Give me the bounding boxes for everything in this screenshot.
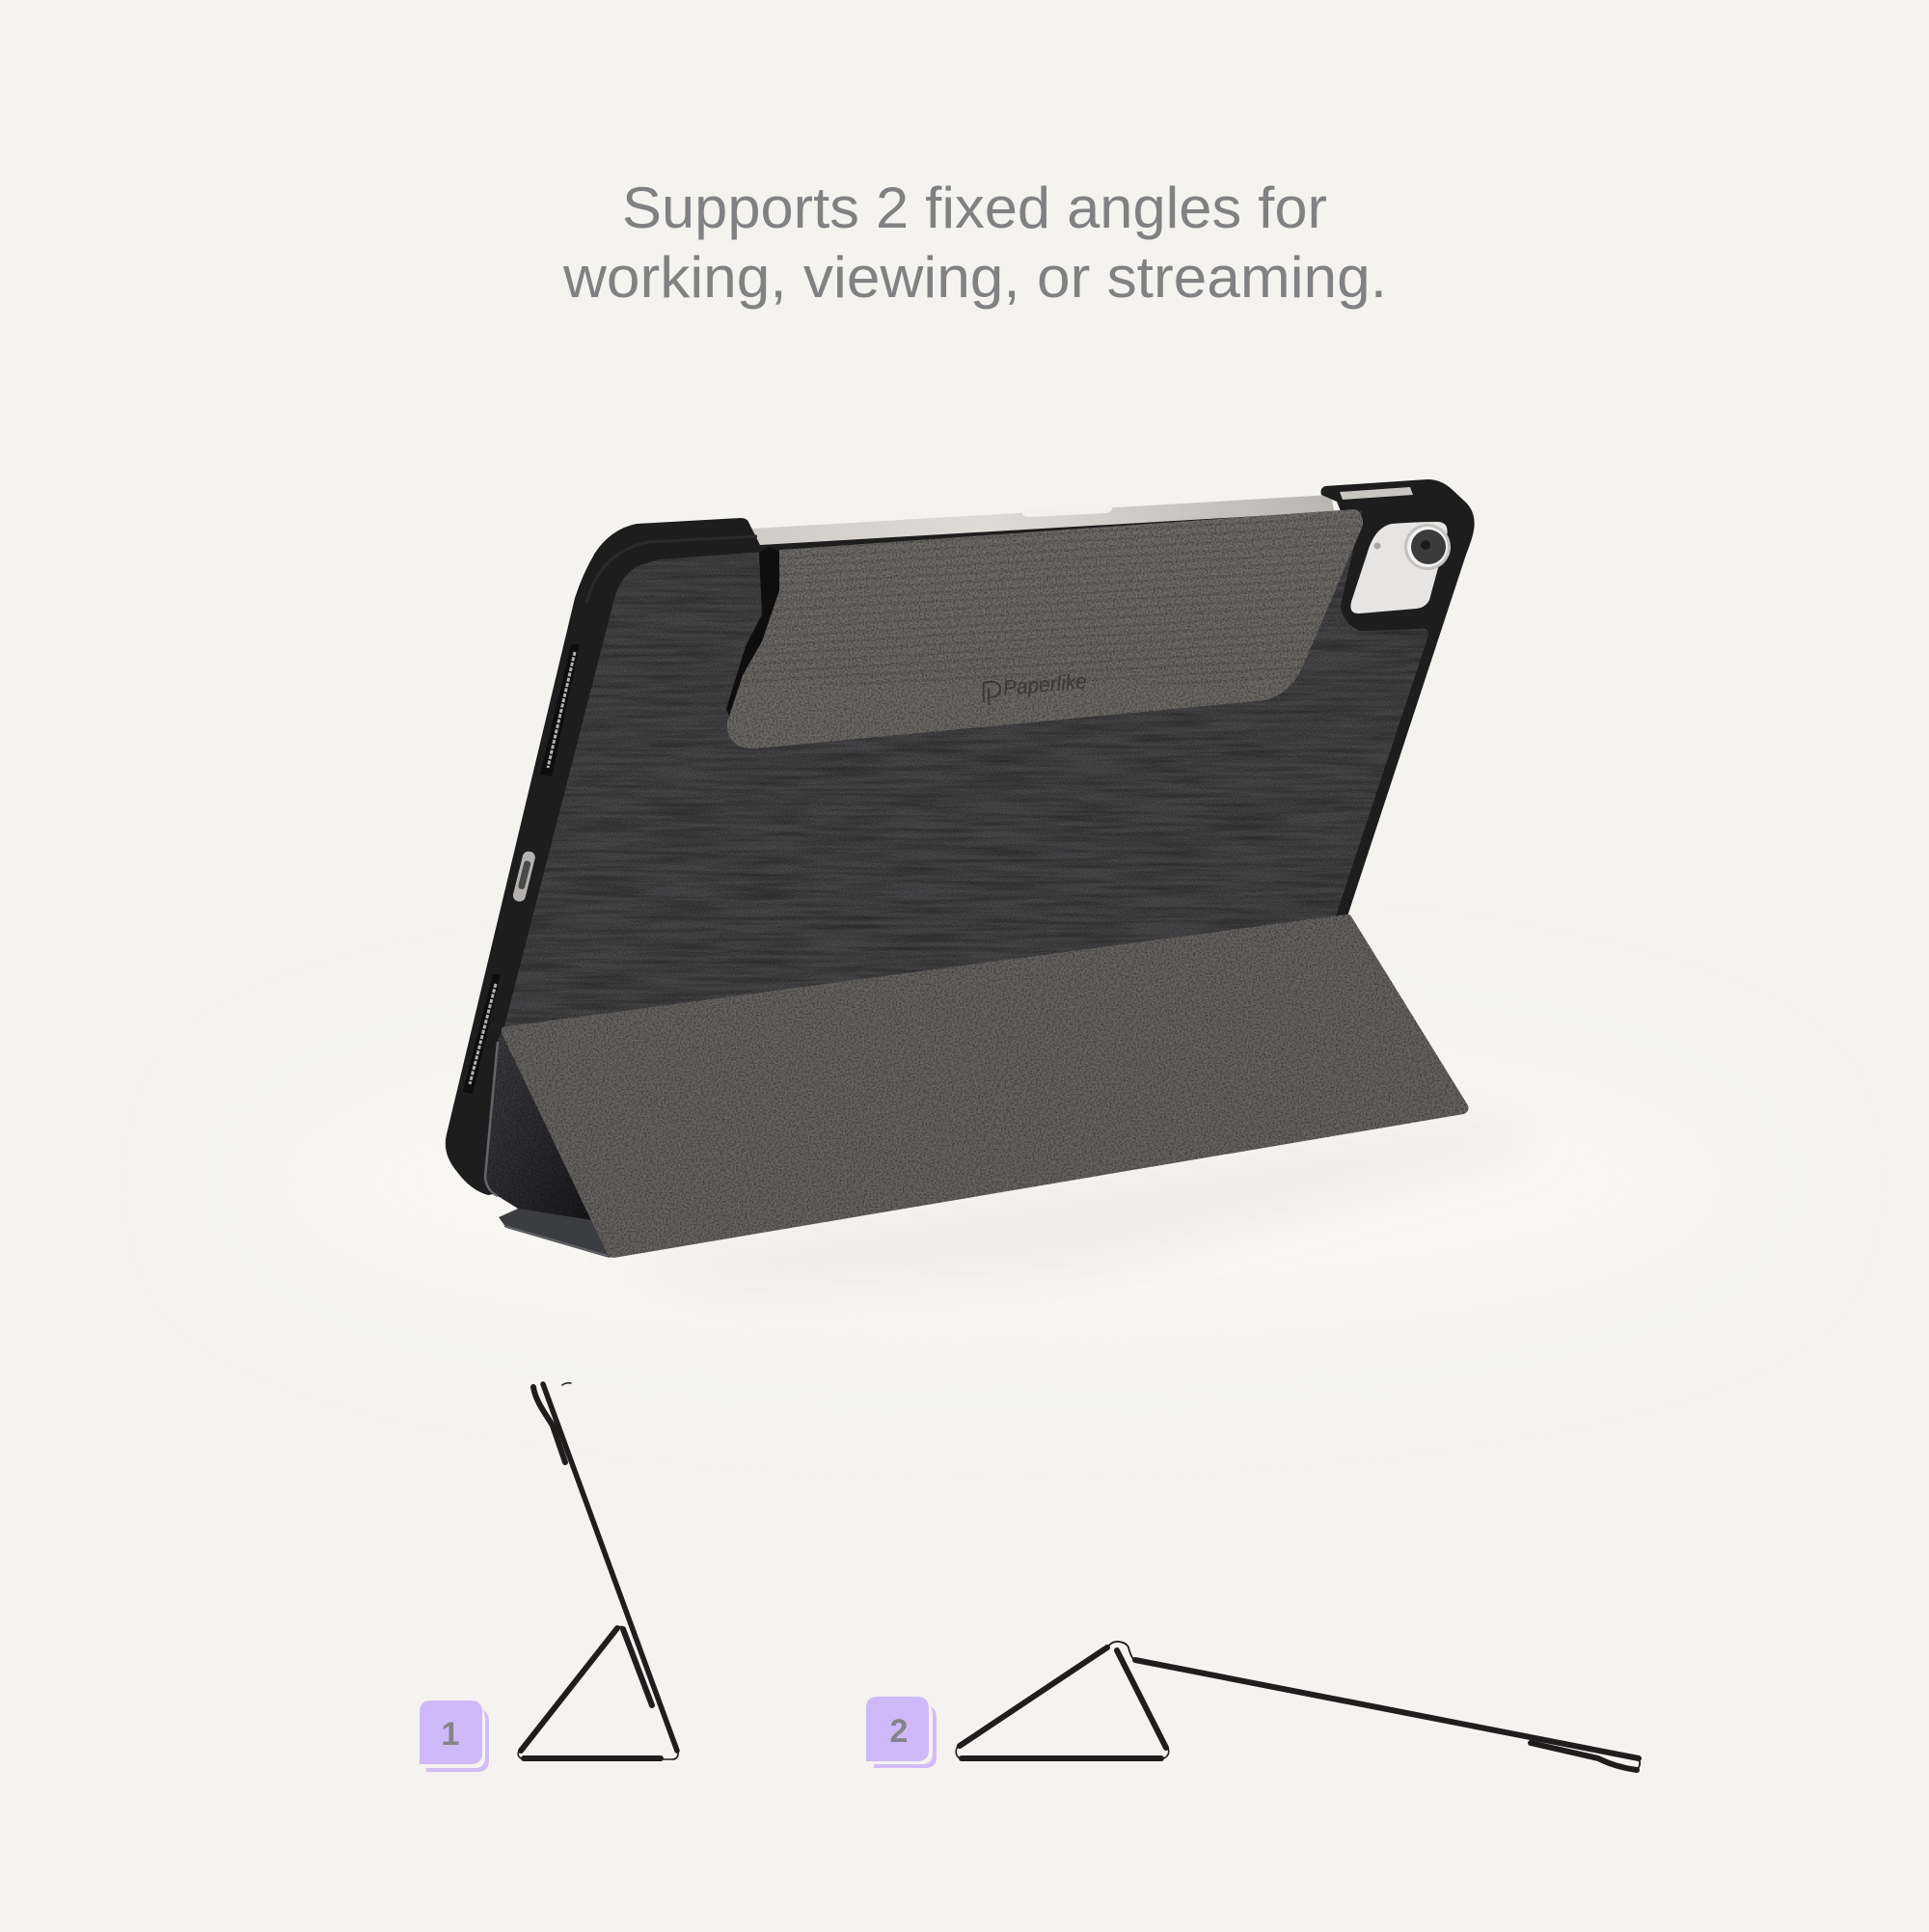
- flap edge: [504, 1226, 608, 1256]
- badge front: [866, 1697, 929, 1761]
- thin joints: [956, 1746, 1169, 1759]
- microphone dot: [1373, 542, 1381, 550]
- heading: Supports 2 fixed angles for: [622, 176, 1327, 240]
- heading: [562, 176, 1387, 310]
- heading: working, viewing, or streaming.: [562, 245, 1387, 310]
- thin joints: [518, 1751, 678, 1759]
- badge back layer: [874, 1706, 937, 1768]
- camera plateau: [1350, 522, 1448, 613]
- top port window: [1340, 487, 1413, 500]
- tablet line: [543, 1384, 677, 1751]
- black camera surround: [1341, 502, 1463, 631]
- badge back layer: [426, 1710, 489, 1772]
- back panel fabric: [502, 511, 1428, 1037]
- badge number: 2: [890, 1713, 908, 1750]
- right leg: [1117, 1650, 1166, 1748]
- lens: [1404, 524, 1451, 570]
- origami stand panel: [502, 914, 1468, 1258]
- floor shadow under stand: [617, 1117, 1543, 1293]
- strap shadow on panel: [726, 547, 779, 719]
- bottom flap: [499, 1209, 611, 1258]
- step 1 badge: [420, 1701, 489, 1772]
- bumper ridge highlight: [586, 536, 757, 603]
- side button: [512, 850, 536, 903]
- camera arc: [562, 1383, 571, 1385]
- base line: [962, 1755, 1161, 1761]
- strap ribbing: [741, 515, 1363, 685]
- stand leg: [521, 1628, 617, 1751]
- folded strap: [1531, 1743, 1637, 1770]
- badge number: 1: [442, 1716, 459, 1753]
- black bumper shell: [446, 479, 1475, 1195]
- silver edge highlight: [1022, 503, 1112, 517]
- silver tablet top edge: [752, 495, 1336, 555]
- strap end: [1637, 1758, 1640, 1770]
- Paperlike logo: [982, 668, 1088, 706]
- tablet line: [1135, 1660, 1639, 1758]
- magnetic pencil strap: [714, 502, 1370, 748]
- base line: [524, 1755, 661, 1761]
- stand diagram 1: [518, 1383, 678, 1759]
- Paperlike logo: Paperlike: [1002, 668, 1088, 700]
- side slit upper: [540, 644, 580, 776]
- side slit lower: [463, 974, 501, 1094]
- apex joint: [1107, 1642, 1133, 1659]
- apex joint: [617, 1627, 623, 1628]
- badge front: [420, 1701, 482, 1764]
- camera cut-out: [1340, 487, 1463, 631]
- fold edge: [485, 1042, 498, 1196]
- inner leg: [623, 1629, 652, 1705]
- floor glow: [251, 1022, 1755, 1341]
- strap line: [533, 1387, 565, 1462]
- step 2 badge: [866, 1697, 937, 1768]
- stand diagram 2: [956, 1642, 1640, 1770]
- product photo: tablet folio case on stand: [446, 479, 1475, 1258]
- inner fold of stand: [485, 1028, 617, 1258]
- stand leg: [960, 1647, 1107, 1746]
